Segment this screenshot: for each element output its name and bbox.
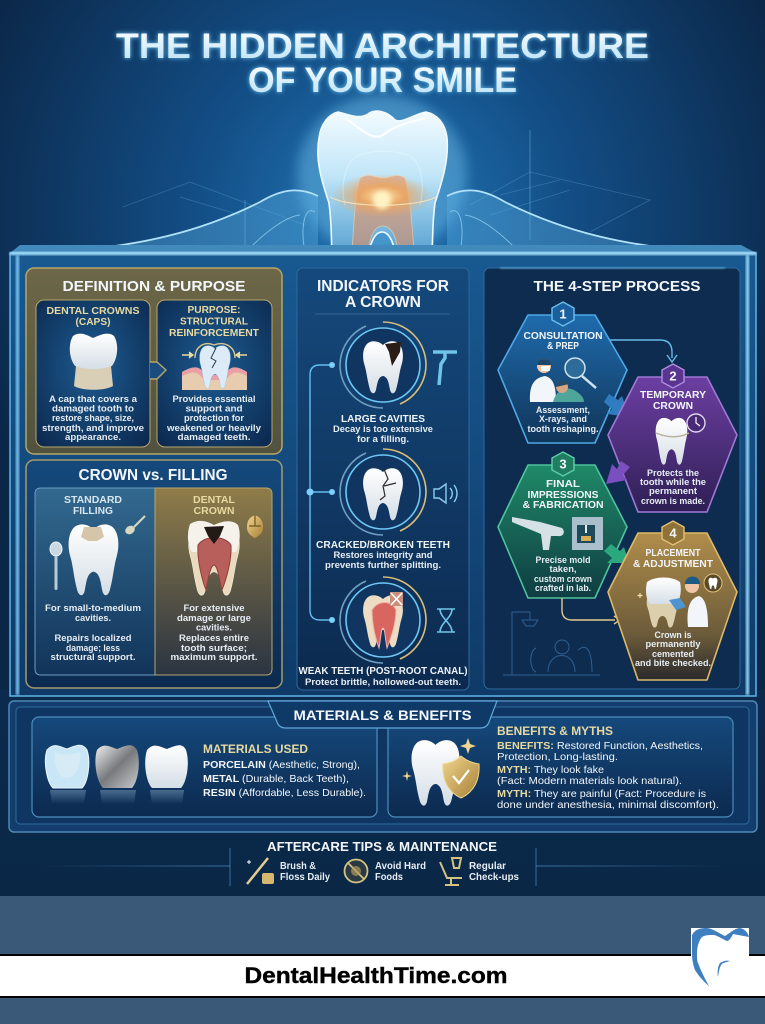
- title: [116, 27, 649, 100]
- card: dental crowns: restore shape, size,: [52, 413, 134, 424]
- indicator: cracked teeth: [316, 449, 457, 571]
- column: standard filling: damage; less: [66, 643, 120, 654]
- arrow: definition to purpose: [150, 362, 166, 379]
- section: aftercare tips: [40, 840, 726, 886]
- column: standard filling: STANDARD: [64, 494, 122, 506]
- step 3: final impressions and fabrication: 3: [559, 456, 567, 472]
- step 3: final impressions and fabrication: IMPRESSIONS: [528, 489, 598, 501]
- tip: brush and floss: [247, 858, 330, 884]
- card: purpose: PURPOSE:: [188, 304, 240, 316]
- column: dental crown: For extensive: [184, 603, 244, 614]
- decoration: dental chair line drawing: [503, 612, 600, 675]
- card: purpose: protection for: [184, 413, 244, 424]
- step 1: consultation and prep: 1: [559, 306, 567, 322]
- step 4: placement and adjustment: and bite checked.: [635, 658, 711, 669]
- indicator: large cavities: LARGE CAVITIES: [341, 413, 425, 425]
- indicator: cracked teeth: CRACKED/BROKEN TEETH: [316, 539, 450, 551]
- card: materials used: RESIN (Affordable, Less Durable).: [203, 787, 366, 799]
- icon: intraoral scanner: [512, 517, 564, 550]
- step 3: final impressions and fabrication: custom crown: [534, 574, 592, 585]
- tip: regular check-ups: Check-ups: [469, 871, 519, 883]
- indicator: cracked teeth: prevents further splitting.: [325, 560, 441, 571]
- heading: crown vs filling: CROWN vs. FILLING: [78, 467, 228, 484]
- column: standard filling: [35, 488, 155, 675]
- column: dental crown: tooth surface;: [181, 643, 247, 654]
- panel: materials and benefits: [9, 701, 757, 832]
- column: dental crown: DENTAL: [193, 494, 236, 506]
- title: THE HIDDEN ARCHITECTURE: [116, 27, 649, 66]
- footer background: [0, 896, 765, 1024]
- heading: 4-step process: THE 4-STEP PROCESS: [534, 279, 701, 295]
- arrow: step 3 to step 4 line: [562, 598, 620, 624]
- heading: aftercare: AFTERCARE TIPS & MAINTENANCE: [267, 840, 497, 854]
- icon: temporary crown tooth with clock: [656, 414, 705, 465]
- indicator: weak teeth: WEAK TEETH (POST-ROOT CANAL): [298, 665, 468, 677]
- card: dental crowns: DENTAL CROWNS: [46, 305, 140, 317]
- panel: 4-step process: [484, 267, 740, 689]
- step 4: placement and adjustment: Crown is: [654, 630, 692, 641]
- step 4: placement and adjustment: [608, 521, 737, 680]
- step 1: consultation and prep: & PREP: [547, 340, 579, 352]
- step 4: placement and adjustment: PLACEMENT: [646, 547, 701, 559]
- card: materials used: [32, 717, 377, 817]
- indicator: cracked teeth: Restores integrity and: [334, 550, 433, 561]
- step 3: final impressions and fabrication: Precise mold: [536, 555, 591, 566]
- arrow: step 2 to step 3 block: [606, 461, 630, 484]
- icon: tooth with shield: [402, 738, 479, 806]
- heading: indicators: A CROWN: [345, 294, 421, 311]
- card: dental crowns: damaged tooth to: [52, 404, 134, 414]
- column: dental crown: [155, 488, 272, 675]
- footer banner: [0, 954, 765, 998]
- step 2: temporary crown: TEMPORARY: [640, 389, 706, 401]
- panel: indicators for a crown: [297, 268, 469, 690]
- card: benefits and myths: (Fact: Modern materials look natural).: [497, 775, 682, 787]
- card: purpose: [157, 300, 272, 447]
- step 2: temporary crown: crown is made.: [641, 496, 705, 507]
- tip: avoid hard foods: Avoid Hard: [375, 860, 426, 872]
- step 1: consultation and prep: tooth reshaping.: [528, 424, 598, 435]
- step 3: final impressions and fabrication: [498, 452, 627, 598]
- card: purpose: REINFORCEMENT: [169, 327, 260, 339]
- arrow: step 3 to step 4 block: [604, 544, 629, 563]
- indicator: large cavities: [333, 322, 457, 445]
- logo: tooth mark: [691, 928, 749, 986]
- tip: regular check-ups: Regular: [469, 860, 506, 872]
- column: standard filling: FILLING: [73, 505, 113, 517]
- card: benefits and myths: done under anesthesia, minimal discomfort).: [497, 799, 719, 811]
- footer banner: DentalHealthTime.com: [244, 963, 508, 988]
- panel: definition and purpose: [26, 268, 282, 454]
- card: dental crowns: A cap that covers a: [49, 394, 138, 405]
- column: dental crown: damage or large: [177, 613, 251, 624]
- column: standard filling: structural support.: [50, 652, 136, 663]
- tip: brush and floss: Floss Daily: [280, 871, 330, 883]
- step 2: temporary crown: 2: [669, 368, 677, 384]
- card: purpose: STRUCTURAL: [180, 316, 249, 328]
- indicator: large cavities: for a filling.: [357, 434, 409, 445]
- step 4: placement and adjustment: & ADJUSTMENT: [633, 558, 714, 570]
- card: benefits and myths: MYTH: They are painful (Fact: Procedure is: [497, 788, 706, 800]
- card: materials used: MATERIALS USED: [203, 742, 308, 756]
- card: purpose: damaged teeth.: [178, 432, 250, 443]
- indicator: weak teeth: [298, 577, 468, 688]
- card: dental crowns: strength, and improve: [42, 423, 144, 434]
- icon: dentist with patient: [530, 358, 596, 402]
- column: standard filling: Repairs localized: [54, 633, 132, 644]
- card: benefits and myths: [388, 717, 733, 817]
- title: OF YOUR SMILE: [248, 61, 517, 100]
- panel: crown vs filling: [26, 460, 282, 688]
- card: benefits and myths: MYTH: They look fake: [497, 764, 604, 776]
- card: dental crowns: [36, 300, 150, 447]
- column: standard filling: cavities.: [75, 613, 111, 624]
- card: benefits and myths: BENEFITS & MYTHS: [497, 726, 613, 738]
- tip: brush and floss: Brush &: [280, 860, 316, 872]
- tip: regular check-ups: [440, 858, 519, 885]
- arrow: step 1 to step 2 block: [604, 394, 629, 417]
- step 3: final impressions and fabrication: & FABRICATION: [522, 499, 604, 511]
- step 1: consultation and prep: Assessment,: [536, 405, 590, 416]
- step 2: temporary crown: tooth while the: [640, 477, 706, 488]
- card: materials used: METAL (Durable, Back Teeth),: [203, 773, 349, 785]
- step 4: placement and adjustment: cemented: [652, 649, 694, 660]
- step 2: temporary crown: permanent: [649, 486, 698, 497]
- indicator: weak teeth: Protect brittle, hollowed-out teeth.: [305, 677, 461, 688]
- tip: avoid hard foods: [344, 860, 426, 883]
- step 1: consultation and prep: [498, 302, 627, 443]
- step 3: final impressions and fabrication: crafted in lab.: [535, 583, 591, 594]
- icon: three crown materials: [45, 745, 188, 804]
- title: THE HIDDEN ARCHITECTURE: [116, 27, 649, 66]
- step 1: consultation and prep: CONSULTATION: [524, 330, 602, 342]
- arrow: step 1 to step 2 line: [608, 340, 677, 362]
- heading tab: materials and benefits: [268, 701, 497, 728]
- title: OF YOUR SMILE: [248, 61, 517, 100]
- step 2: temporary crown: [608, 364, 737, 512]
- step 2: temporary crown: CROWN: [653, 400, 693, 412]
- lower background band: [0, 690, 765, 896]
- icon: milling machine: [572, 517, 603, 550]
- card: purpose: support and: [186, 404, 243, 414]
- tip: avoid hard foods: Foods: [375, 871, 403, 883]
- step 3: final impressions and fabrication: FINAL: [546, 478, 581, 490]
- indicator: large cavities: Decay is too extensive: [333, 424, 433, 435]
- card: purpose: weakened or heavily: [166, 423, 262, 434]
- column: dental crown: cavities.: [196, 622, 232, 634]
- card: benefits and myths: Protection, Long-lasting.: [497, 751, 618, 763]
- step 4: placement and adjustment: 4: [669, 526, 677, 540]
- step 3: final impressions and fabrication: taken,: [550, 564, 577, 575]
- icon: dental drill: [433, 352, 457, 385]
- heading: indicators: [317, 278, 449, 311]
- step 4: placement and adjustment: permanently: [646, 639, 701, 650]
- column: dental crown: maximum support.: [170, 652, 258, 663]
- heading: indicators: INDICATORS FOR: [317, 278, 449, 295]
- hero tooth with gums and blueprint lines: [60, 95, 705, 255]
- icon: crown placement with dentist: [638, 574, 722, 628]
- icon: hourglass: [437, 609, 455, 632]
- step 1: consultation and prep: X-rays, and: [539, 414, 587, 425]
- heading: definition and purpose: DEFINITION & PURPOSE: [62, 278, 246, 295]
- column: standard filling: For small-to-medium: [45, 603, 141, 614]
- card: dental crowns: (CAPS): [76, 316, 110, 328]
- main frame panel: [10, 245, 756, 696]
- card: dental crowns: appearance.: [65, 432, 121, 443]
- connector line: [306, 362, 335, 623]
- heading tab: materials and benefits: MATERIALS & BENEFITS: [294, 707, 472, 723]
- card: purpose: Provides essential: [172, 394, 256, 405]
- card: materials used: PORCELAIN (Aesthetic, Strong),: [203, 759, 360, 771]
- column: dental crown: Replaces entire: [179, 633, 249, 644]
- column: dental crown: CROWN: [194, 505, 234, 517]
- icon: speaker: [434, 484, 457, 503]
- card: benefits and myths: BENEFITS: Restored Function, Aesthetics,: [497, 740, 703, 752]
- step 2: temporary crown: Protects the: [647, 468, 699, 479]
